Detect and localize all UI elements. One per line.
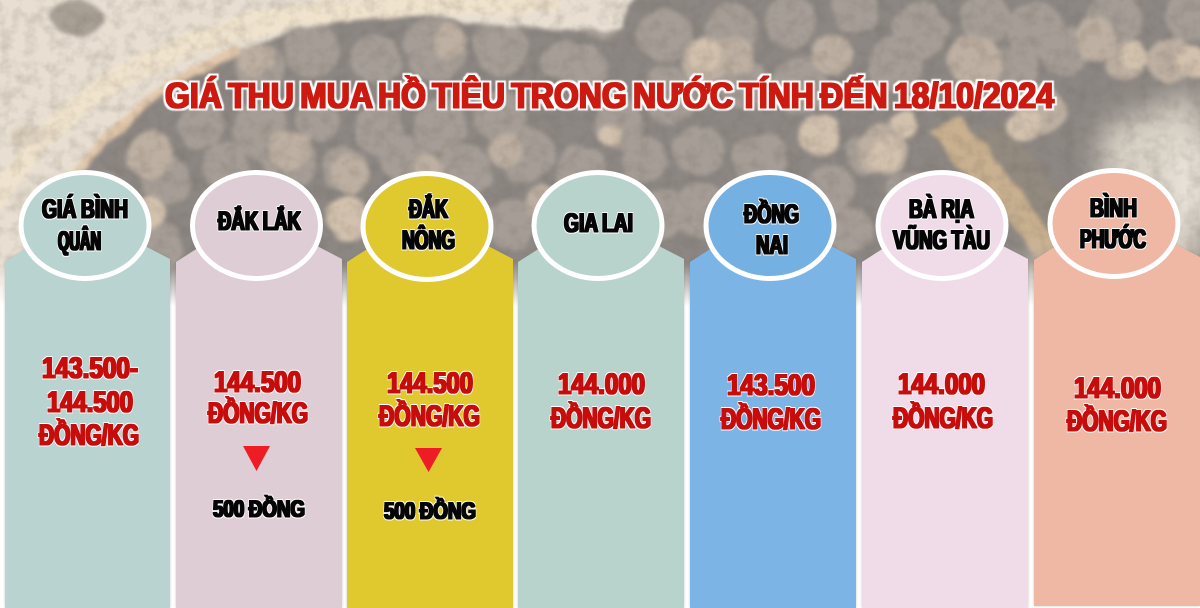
price: Gia Lai (551, 368, 651, 435)
header oval: Giá bình quân: QUÂN (58, 225, 101, 256)
price: Giá bình quân: 143.500- (42, 352, 138, 385)
price: Bà Rịa Vũng Tàu: 144.000 (898, 368, 985, 401)
panel: Đồng Nai (690, 172, 856, 608)
price: Giá bình quân (39, 352, 139, 452)
header oval: Gia Lai (534, 172, 662, 278)
price: Đồng Nai: 143.500 (727, 369, 815, 402)
header oval: Bình Phước: PHƯỚC (1080, 223, 1146, 254)
price: Đắk Lắk: ĐỒNG/KG (208, 396, 308, 430)
header oval: Bà Rịa Vũng Tàu (878, 172, 1006, 278)
icon: down arrow Đắk Nông (415, 448, 442, 472)
header oval: Bình Phước (1050, 170, 1178, 276)
header oval: Đắk Lắk (192, 172, 320, 278)
change: Đắk Nông: 500 ĐỒNG (384, 497, 476, 525)
price: Đắk Nông: ĐỒNG/KG (379, 399, 480, 433)
price: Đồng Nai: ĐỒNG/KG (721, 402, 821, 436)
header oval: Đồng Nai: ĐỒNG (744, 198, 799, 229)
header oval: Gia Lai: GIA LAI (564, 208, 633, 238)
panel: Giá bình quân (5, 172, 170, 608)
header oval: Đắk Nông: ĐẮK (409, 193, 448, 224)
icon: down arrow Đắk Lắk (243, 446, 270, 471)
header oval: Đồng Nai (706, 172, 834, 278)
panel: Bình Phước (1034, 170, 1200, 606)
price: Đồng Nai (721, 369, 821, 436)
price: Giá bình quân: ĐỒNG/KG (39, 418, 139, 452)
price: Bà Rịa Vũng Tàu (893, 368, 993, 435)
header oval: Đồng Nai: NAI (756, 230, 788, 260)
price: Đắk Lắk: 144.500 (214, 366, 301, 399)
price: Đắk Nông (379, 367, 480, 433)
header oval: Đắk Nông: NÔNG (402, 224, 455, 255)
panel: Đắk Nông (347, 174, 513, 608)
change: Đắk Lắk: 500 ĐỒNG (213, 495, 305, 523)
header oval: Đắk Lắk: ĐẮK LẮK (218, 205, 301, 236)
price: Đắk Nông: 144.500 (387, 367, 473, 400)
header oval: Bà Rịa Vũng Tàu: VŨNG TÀU (893, 224, 990, 255)
panel: Gia Lai (518, 172, 684, 608)
panel: Bà Rịa Vũng Tàu (862, 172, 1028, 608)
price: Bình Phước: 144.000 (1074, 372, 1161, 405)
price: Gia Lai: ĐỒNG/KG (551, 401, 651, 435)
header oval: Giá bình quân: GIÁ BÌNH (42, 193, 128, 224)
header oval: Bà Rịa Vũng Tàu: BÀ RỊA (909, 193, 974, 224)
price: Đắk Lắk (208, 366, 308, 430)
header oval: Giá bình quân (21, 172, 149, 278)
price: Giá bình quân: 144.500 (47, 386, 133, 419)
title: GIÁ THU MUA HỒ TIÊU TRONG NƯỚC TÍNH ĐẾN 18/10/2024 (165, 74, 1054, 116)
header oval: Bình Phước: BÌNH (1090, 192, 1137, 223)
price: Bà Rịa Vũng Tàu: ĐỒNG/KG (893, 401, 993, 435)
header oval: Đắk Nông (363, 174, 491, 280)
price: Gia Lai: 144.000 (558, 368, 645, 401)
panel: Đắk Lắk (176, 172, 342, 608)
price: Bình Phước (1067, 372, 1167, 438)
